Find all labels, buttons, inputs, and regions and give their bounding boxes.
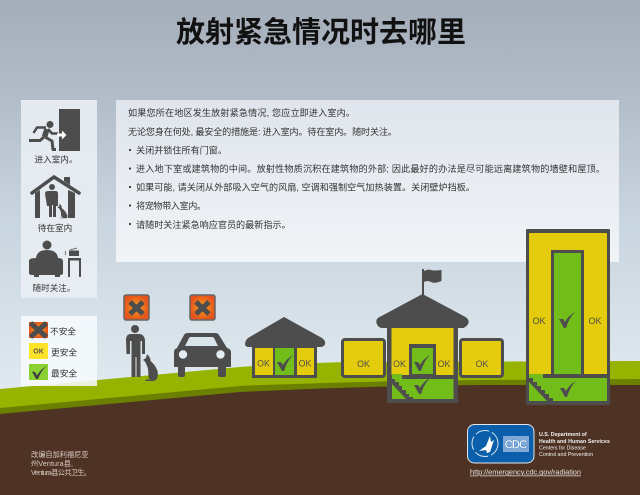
title: 放射紧急情况时去哪里 bbox=[176, 16, 466, 49]
label: go inside: 进入室内。 bbox=[35, 154, 77, 164]
brown soil bbox=[0, 385, 640, 495]
bullet list: 请随时关注紧急响应官员的最新指示。 bbox=[136, 219, 291, 230]
legend: safer: 更安全 bbox=[51, 346, 77, 358]
CDC logo: CDC bbox=[504, 438, 528, 452]
small house: OK bbox=[257, 358, 270, 368]
walls bbox=[387, 326, 458, 403]
roof bbox=[376, 294, 469, 328]
tall building: OK bbox=[532, 316, 546, 326]
legend: safer bbox=[29, 343, 77, 359]
bullet list: 关闭并锁住所有门窗。 bbox=[136, 144, 227, 156]
HHS text: Health and Human Services bbox=[539, 439, 610, 445]
green hill bbox=[0, 361, 640, 495]
left annex bbox=[342, 340, 384, 376]
label: stay inside: 待在室内 bbox=[38, 222, 72, 233]
car bbox=[174, 333, 231, 377]
legend: safest: 最安全 bbox=[51, 368, 77, 378]
ground bbox=[0, 361, 640, 495]
right annex bbox=[460, 340, 502, 376]
small house: OK bbox=[299, 358, 311, 368]
icon: run inside door bbox=[29, 109, 80, 151]
HHS text: Centers for Disease bbox=[539, 446, 586, 452]
dark green band bbox=[0, 379, 640, 495]
large house with basement: OK bbox=[438, 359, 450, 369]
intro text: 如果您所在地区发生放射紧急情况, 您应立即进入室内。 bbox=[128, 107, 355, 118]
flag bbox=[422, 269, 442, 296]
credit note: 州Ventura县, bbox=[31, 459, 73, 468]
tall building: OK bbox=[588, 316, 602, 326]
credit note: Ventura县公共卫生。 bbox=[31, 468, 91, 477]
left annex: OK bbox=[357, 359, 370, 369]
intro text bbox=[128, 107, 397, 137]
HHS text: U.S. Department of bbox=[539, 432, 587, 438]
large house with basement: OK bbox=[393, 359, 406, 369]
bullet list bbox=[129, 144, 605, 230]
label: stay tuned: 随时关注。 bbox=[33, 282, 75, 293]
large house with basement bbox=[376, 269, 469, 403]
credit note: 改编自加利福尼亚 bbox=[31, 450, 89, 459]
car headlights bbox=[179, 350, 225, 359]
right annex: OK bbox=[476, 359, 488, 369]
bullet list: 进入地下室或建筑物的中间。放射性物质沉积在建筑物的外部; 因此最好的办法是尽可能远离建筑物的墙壁和屋顶。 bbox=[136, 163, 605, 174]
basement bbox=[392, 374, 454, 399]
legend: safer: OK bbox=[33, 348, 44, 356]
website link: http://emergency.cdc.gov/radiation bbox=[470, 468, 581, 476]
panel: legend bbox=[21, 316, 97, 386]
central room bbox=[409, 344, 436, 376]
intro text: 无论您身在何处, 最安全的措施是: 进入室内。待在室内。随时关注。 bbox=[128, 126, 397, 137]
panel: three steps bbox=[21, 100, 97, 298]
icon: person in armchair with radio bbox=[29, 240, 81, 277]
icon: unsafe person bbox=[124, 295, 149, 320]
small house bbox=[245, 317, 325, 378]
person and dog outside bbox=[126, 325, 158, 381]
tall building bbox=[526, 229, 610, 405]
credit note bbox=[31, 450, 91, 477]
CDC logo bbox=[468, 424, 534, 463]
bullet list: 如果可能, 请关闭从外部吸入空气的风扇, 空调和强制空气加热装置。关闭壁炉挡板。 bbox=[136, 182, 475, 192]
icon: house with person and dog bbox=[32, 177, 79, 218]
HHS text: Control and Prevention bbox=[539, 452, 593, 458]
HHS text bbox=[539, 432, 610, 458]
legend: unsafe: 不安全 bbox=[50, 326, 76, 336]
icon: unsafe car bbox=[190, 295, 215, 320]
bullet list: 将宠物带入室内。 bbox=[136, 200, 206, 211]
panel: instructions bbox=[116, 100, 619, 262]
